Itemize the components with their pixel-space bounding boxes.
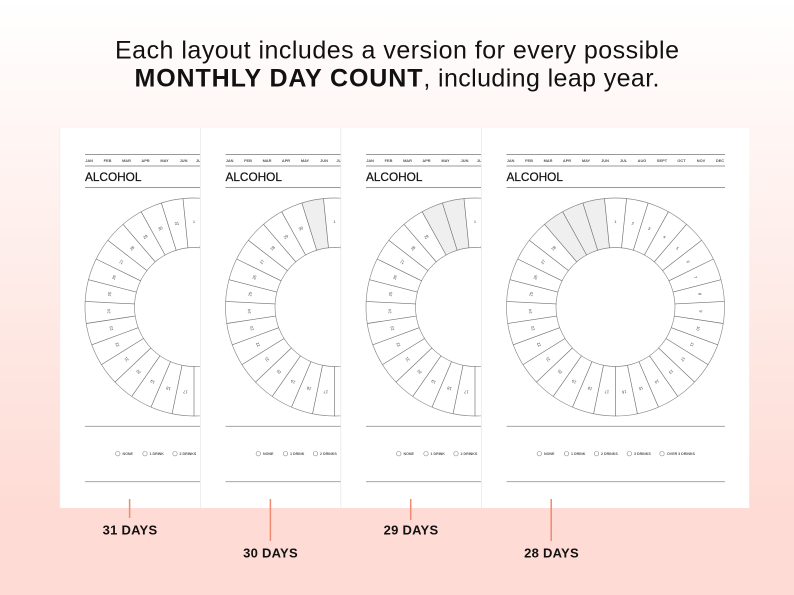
month row: JAN [85,158,93,163]
wheel chart: 26 [111,274,117,280]
wheel chart: 8 [697,293,703,296]
wheel chart: 12 [679,356,686,363]
wheel chart: 23 [389,325,395,331]
wheel chart: 13 [667,369,674,376]
wheel chart: 18 [586,385,593,392]
month row: JUL [196,158,204,163]
month row: SEPT [657,158,668,163]
wheel chart: 26 [392,274,398,280]
month row: MAR [263,158,272,163]
wheel chart: 22 [254,341,261,348]
title: MONTHLY DAY COUNT, including leap year. [134,64,660,92]
legend [397,452,478,456]
legend: 2 DRINKS [460,452,478,456]
wheel chart: 24 [246,308,252,314]
callout: 29 days: 29 DAYS [384,522,438,538]
wheel chart: 25 [247,291,253,297]
month row: MAY [441,158,450,163]
wheel chart: 19 [289,378,296,385]
title [115,36,679,92]
month row: JUL [477,158,485,163]
legend: 1 DRINK [571,452,586,456]
wheel chart: 4 [662,234,667,240]
wheel chart: 19 [149,378,156,385]
panel: 29 days page [340,128,486,508]
month row: FEB [385,158,393,163]
legend: 1 DRINK [290,452,305,456]
wheel chart: 24 [387,308,392,314]
month row: JUN [461,158,469,163]
wheel chart: 28 [269,244,276,251]
heading: ALCOHOL [226,170,282,184]
month row: JUL [336,158,344,163]
wheel chart: 10 [695,326,701,332]
wheel chart: 22 [114,341,120,348]
wheel chart: 26 [251,274,258,280]
wheel chart: 17 [182,389,188,395]
wheel chart [366,198,584,416]
month row [226,158,344,163]
month row: NOV [697,158,706,163]
wheel chart: 14 [653,379,660,385]
legend: 1 DRINK [430,452,445,456]
callout: 31 days: 31 DAYS [103,522,157,538]
month row: AUG [638,158,646,163]
legend: 1 DRINK [150,452,164,456]
wheel chart: 28 [129,244,136,251]
wheel chart [506,198,724,416]
month row: FEB [525,158,533,163]
month row: APR [563,158,571,163]
wheel chart: 23 [530,325,536,331]
heading: ALCOHOL [85,170,142,184]
wheel chart: 21 [544,355,551,363]
month row: MAR [403,158,412,163]
wheel chart [226,198,444,416]
wheel chart: 25 [528,291,534,297]
legend [256,452,337,456]
month row: JUL [620,158,628,163]
title: Each layout includes a version for every possible [115,36,679,64]
wheel chart: 17 [604,389,609,395]
wheel chart: 19 [430,378,437,385]
legend: 2 DRINKS [320,452,337,456]
wheel chart: 29 [142,233,149,240]
month row: APR [282,158,290,163]
month row: JUN [320,158,328,163]
wheel chart: 11 [689,342,695,348]
callout: 31 days [103,499,157,538]
month row: MAR [122,158,131,163]
wheel chart: 27 [118,258,125,265]
wheel chart: 16 [621,389,627,395]
wheel chart: 16 [480,389,486,395]
wheel chart: 28 [550,244,557,251]
wheel chart: 23 [249,325,255,331]
callout: 30 days: 30 DAYS [243,546,298,560]
month row [366,158,485,163]
month row: MAY [582,158,591,163]
legend: 2 DRINKS [601,452,618,456]
legend: NONE [544,452,555,456]
wheel chart: 16 [340,389,346,395]
month row [507,158,724,163]
wheel chart: 27 [259,258,266,265]
wheel chart: 16 [199,389,205,395]
legend: OVER 3 DRINKS [667,452,696,456]
wheel chart [85,198,303,416]
wheel chart: 28 [410,244,417,251]
wheel chart: 24 [106,308,111,314]
legend [116,452,197,456]
wheel chart: 23 [108,325,114,331]
legend [537,452,696,456]
wheel chart: 29 [423,233,430,240]
panel: 28 days page [481,128,750,508]
month row: FEB [244,158,252,163]
wheel chart: 19 [570,378,577,385]
legend: 3 DRINKS [634,452,651,456]
month row: DEC [716,158,724,163]
wheel chart: 20 [275,368,282,375]
month row: MAY [301,158,310,163]
wheel chart: 6 [685,259,691,265]
month row: OCT [677,158,686,163]
month row: JUN [601,158,609,163]
wheel chart: 20 [134,368,142,375]
heading: ALCOHOL [506,170,563,184]
wheel chart: 22 [395,341,401,348]
wheel chart: 22 [535,341,542,348]
wheel chart: 31 [174,220,180,226]
wheel chart: 15 [637,386,644,392]
wheel chart: 1 [333,219,336,224]
heading: ALCOHOL [366,170,423,184]
wheel chart: 18 [446,385,452,392]
wheel chart: 9 [698,310,703,313]
month row: JUN [180,158,188,163]
month row: MAR [544,158,553,163]
panel: 30 days page [200,128,346,508]
wheel chart: 18 [305,385,312,392]
month row: APR [422,158,431,163]
wheel chart: 26 [532,274,539,280]
wheel chart: 29 [282,233,290,240]
wheel chart: 24 [527,308,533,314]
wheel chart: 27 [399,258,406,265]
wheel chart: 2 [631,221,635,226]
callout: 30 days [243,499,298,560]
wheel chart: 21 [123,355,130,363]
wheel chart: 25 [388,291,393,297]
wheel chart: 5 [675,246,681,251]
month row [85,158,204,163]
wheel chart: 17 [323,389,328,395]
month row: FEB [104,158,112,163]
wheel chart: 1 [193,219,196,224]
legend: NONE [404,452,414,456]
month row: JAN [507,158,515,163]
wheel chart: 1 [614,219,617,224]
wheel chart: 18 [165,385,171,392]
legend: NONE [122,452,133,456]
month row: JAN [366,158,374,163]
callout: 28 days [524,499,579,560]
wheel chart: 30 [298,225,305,232]
wheel chart: 25 [107,291,112,297]
month row: MAY [160,158,169,163]
wheel chart: 3 [647,226,652,231]
legend: 2 DRINKS [180,452,197,456]
wheel chart: 30 [157,225,164,232]
wheel chart: 20 [415,368,423,375]
wheel chart: 21 [263,355,270,363]
wheel chart: 20 [556,368,563,375]
legend: NONE [263,452,274,456]
panel: 31 days page [60,128,205,508]
month row: JAN [226,158,234,163]
wheel chart: 21 [404,355,411,363]
wheel chart: 17 [463,389,469,395]
callout: 28 days: 28 DAYS [524,546,579,560]
wheel chart: 27 [540,258,547,265]
wheel chart: 7 [693,275,699,280]
wheel chart: 1 [474,219,477,224]
callout: 29 days [384,499,438,538]
month row: APR [141,158,150,163]
